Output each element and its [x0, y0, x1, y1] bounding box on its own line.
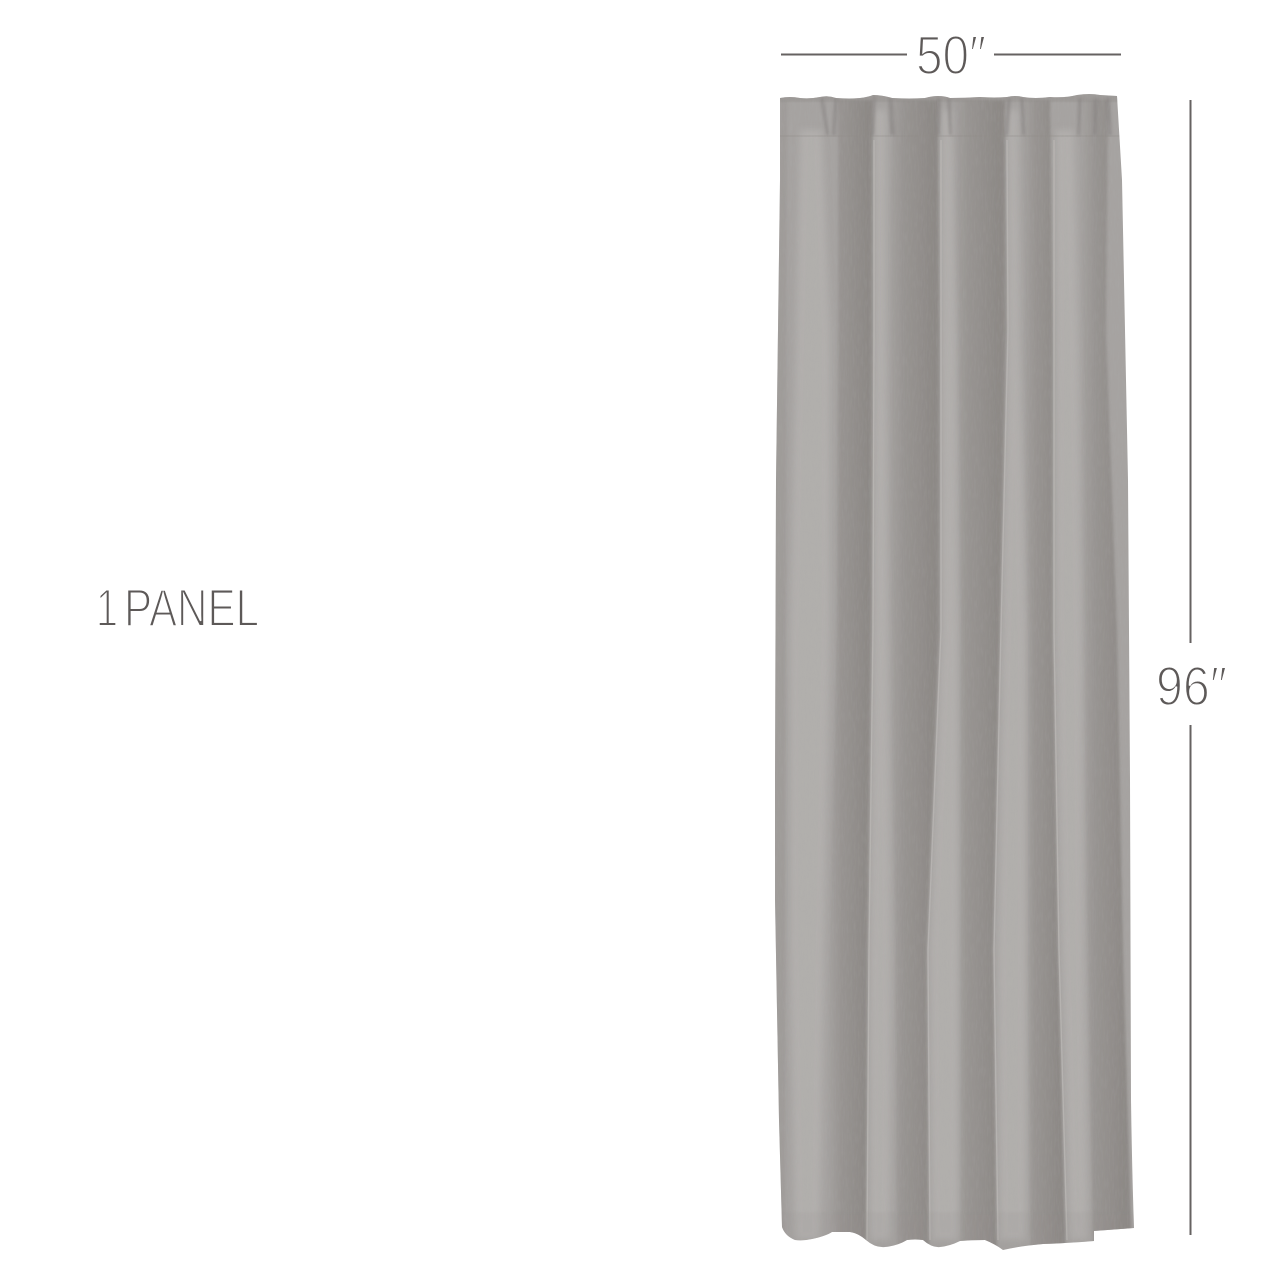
- linen texture: [770, 90, 1140, 1255]
- curtain bottom hem: [770, 1212, 1140, 1252]
- curtain fold shadows: [772, 100, 1132, 1260]
- width dimension: 50″: [916, 24, 986, 86]
- panel count label: 1: [96, 579, 118, 638]
- panel count label: PANEL: [124, 579, 259, 638]
- curtain header gathers: [820, 96, 1112, 135]
- curtain fold edge lines: [867, 140, 1067, 1240]
- height dimension: 96″: [1156, 655, 1227, 717]
- curtain rod pocket ruffle: [778, 94, 1120, 102]
- panel count label: [96, 579, 259, 638]
- curtain panel photo: [770, 90, 1140, 1260]
- curtain highlights: [790, 110, 1088, 1240]
- curtain header seam: [801, 135, 1120, 137]
